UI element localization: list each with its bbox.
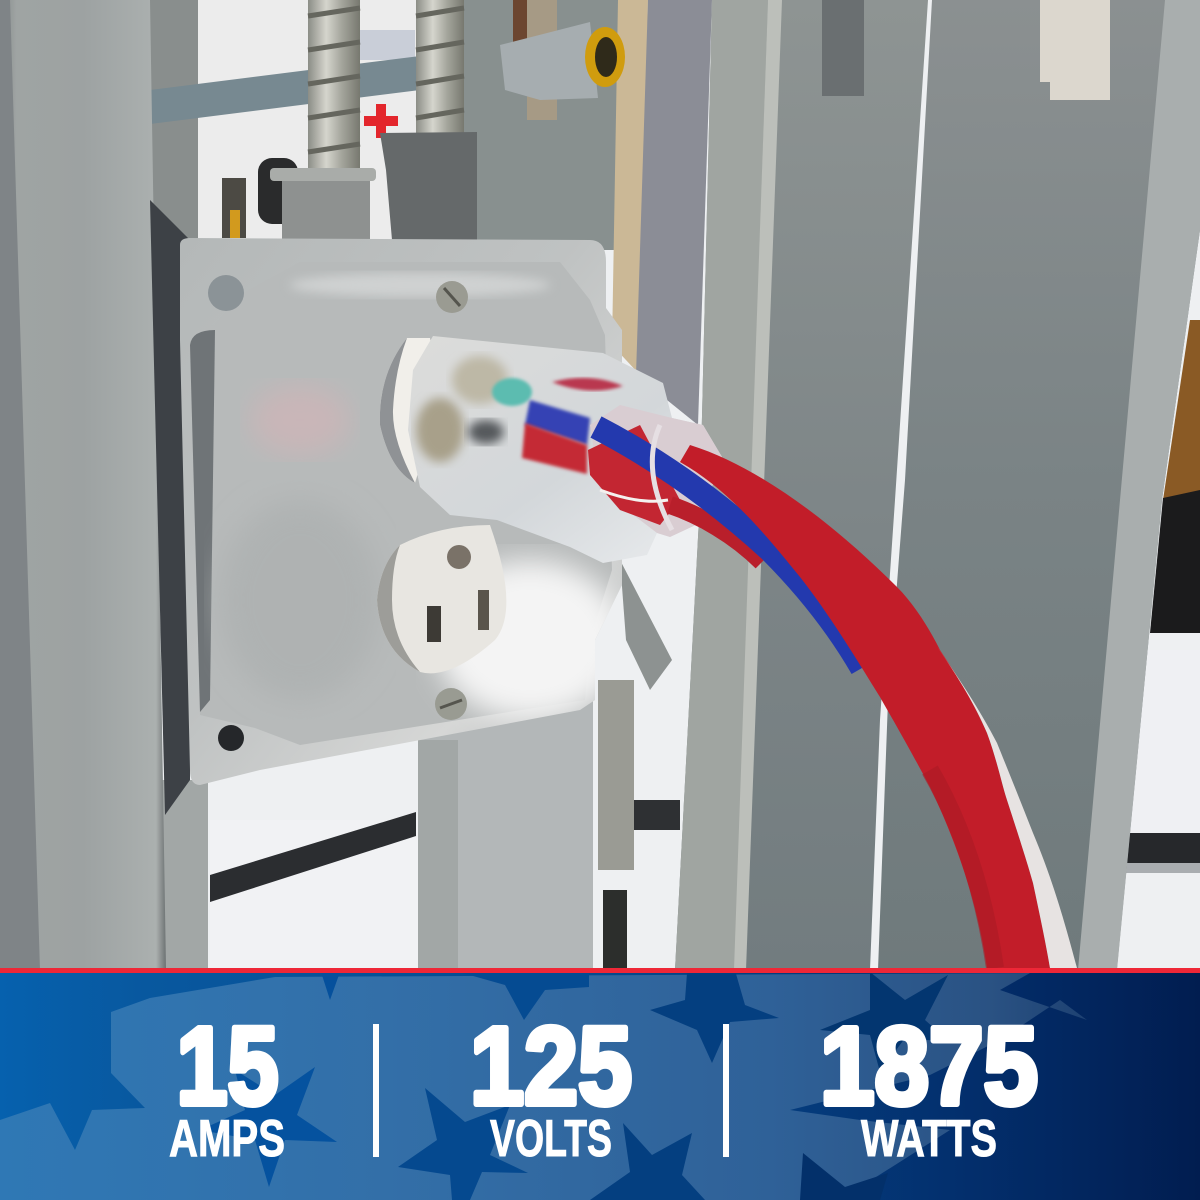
stat: 15 amps (169, 1005, 285, 1168)
stat: 125 volts (470, 1005, 632, 1168)
panel: red and blue power cord (596, 425, 1077, 968)
red top stripe (0, 968, 1200, 973)
panel: clear plug end with cord (380, 336, 722, 563)
stat: 125 volts: 125 (470, 1005, 632, 1128)
divider: right (723, 1024, 729, 1157)
photo: hanging wire and grey stick (598, 560, 672, 970)
photo: flexible metal conduits (308, 0, 464, 170)
divider: left (373, 1024, 379, 1157)
icon: screws (208, 275, 468, 751)
stat: 125 volts: VOLTS (490, 1110, 612, 1168)
photo: left metal stud (0, 0, 208, 970)
panel: lower outlet receptacle (377, 525, 506, 673)
photo: rope and grey mesh (612, 0, 712, 425)
photo: conduit fitting with yellow bushing (500, 22, 625, 100)
stat: 1875 watts: WATTS (861, 1110, 997, 1168)
banner (0, 960, 1200, 1200)
photo: centre metal stud (418, 0, 620, 970)
photo: right metal studs (675, 0, 1200, 970)
photo: horizontal grey pipe (150, 56, 420, 124)
stat: 1875 watts (820, 1005, 1038, 1168)
stat: 15 amps: AMPS (169, 1110, 285, 1168)
dark stars (200, 960, 950, 1200)
photo: metal outlet box cover (180, 238, 625, 785)
lighter distressed texture (0, 973, 1087, 1200)
photo: conduit connectors (258, 132, 477, 240)
stat: 1875 watts: 1875 (820, 1005, 1038, 1128)
stat: 15 amps: 15 (176, 1005, 278, 1128)
icon: red cross (364, 104, 398, 138)
